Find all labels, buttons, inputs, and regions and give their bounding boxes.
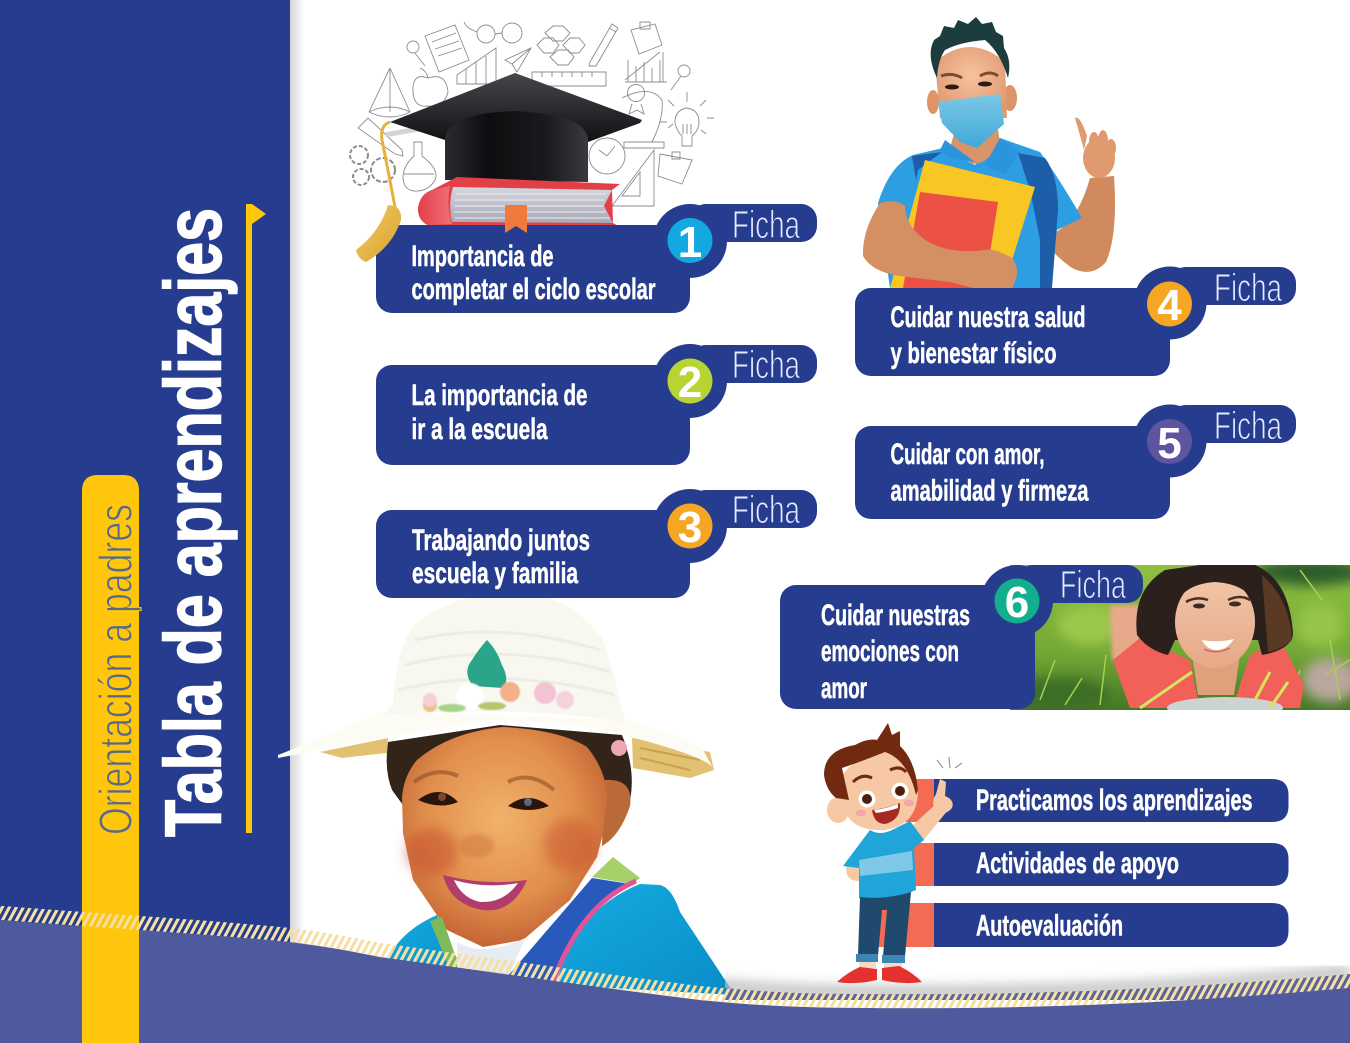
mask [938,94,1004,148]
straw brim underside [320,738,714,778]
head [842,752,918,830]
panel: ficha 6: Cuidar nuestras [821,599,970,632]
hat brim [278,712,713,768]
eyes and brows [1186,597,1250,602]
photo: girl lying in the grass [1010,558,1350,719]
shirt [843,821,924,900]
red shoes [837,966,922,983]
panel: ficha 3: 3 [678,503,702,552]
foreground blades [1140,672,1288,708]
raised arm [912,802,948,842]
icon: bookmark [505,205,527,233]
panel: section list: Actividades de apoyo [976,847,1179,880]
grass background [1010,565,1350,710]
collar [500,878,630,985]
grass blades [1040,570,1350,705]
panel: ficha 5: Cuidar con amor, [890,438,1044,471]
eyes [945,84,959,90]
hatched strip [0,912,1350,1001]
shadow above the wave [700,972,1350,992]
panel: ficha 3 [376,489,817,598]
icon: tassel [356,122,401,262]
illustration: cartoon boy [824,723,962,983]
yellow tab [82,475,139,1043]
pillow [1167,697,1283,710]
number 6 [994,578,1040,624]
ear [827,797,849,823]
bottom wave [0,920,1350,1043]
subtitle: Orientación a padres [90,504,142,835]
panel: ficha 1: completar el ciclo escolar [412,273,656,306]
panel: ficha 5 [855,404,1296,519]
panel: ficha 1 [376,204,817,313]
panel: ficha 6 [780,564,1143,709]
cheeks [856,810,866,816]
fringe [1184,576,1245,594]
hair [387,725,632,830]
panel: blue sidebar [0,0,304,960]
raised hand [1075,118,1116,178]
right arm [1052,176,1115,272]
panel: ficha 4: y bienestar físico [890,337,1056,370]
panel: ficha 1: 1 [678,218,702,267]
shirt [878,138,1082,288]
illustration: school doodles [350,22,714,206]
panel: ficha 3: Trabajando juntos [412,524,590,557]
mouth [443,875,527,910]
hat crown [383,590,625,722]
cap board [390,73,642,142]
panel: ficha 3: escuela y familia [412,557,578,590]
face [935,47,1007,118]
neck [950,130,1000,164]
cuffs [856,954,905,963]
wave band background [725,974,1350,1000]
panel: ficha 6: 6 [1005,578,1029,627]
right sweater [556,884,735,995]
left arm and hand [863,201,1017,288]
left arm [846,860,862,882]
hair [824,723,918,800]
ears [927,90,939,114]
nose [460,834,494,858]
panel: ficha 5: amabilidad y firmeza [890,474,1089,508]
backpack straps [1018,153,1058,288]
hair flower [611,740,627,756]
number 3 [668,504,712,548]
hat leaf [467,640,506,688]
title flag line [246,204,266,833]
white undershirt [457,938,525,985]
panel: ficha 2: Ficha [732,344,800,387]
panel: ficha 5: Ficha [1214,405,1282,448]
panel: ficha 2 [376,344,817,465]
number 2 [668,358,712,404]
ear [602,780,630,846]
book [418,177,620,227]
number 1 [668,218,712,263]
left sweater [385,915,470,980]
hat flowers [423,682,574,712]
arm [1110,605,1145,660]
panel: ficha 1: Ficha [732,204,800,247]
panel: ficha 5: 5 [1157,419,1182,468]
photo: boy with mask and books [863,17,1116,288]
panel: ficha 6: amor [821,672,867,705]
pink strap [552,881,636,985]
jeans [858,892,911,956]
smile [1202,639,1234,650]
cap body [445,110,588,182]
red book [903,192,998,288]
eyes [418,792,458,806]
neck [1192,655,1240,695]
panel: section list: Autoevaluación [976,910,1123,942]
panel: ficha 4: Cuidar nuestra salud [890,301,1086,334]
collar [940,138,1020,175]
panel: ficha 4: 4 [1157,281,1182,330]
face [1175,576,1255,668]
number 4 [1147,282,1192,326]
face [402,727,607,947]
panel: ficha 2: La importancia de [412,379,588,412]
hair [931,17,1009,78]
eyes [858,790,876,808]
panel: ficha 6: emociones con [821,635,959,668]
panel: ficha 4: Ficha [1214,267,1282,310]
panel: ficha 4 [855,266,1296,376]
mouth [872,803,900,824]
panel: ficha 2: 2 [678,358,702,407]
panel: ficha 6: Ficha [1060,564,1126,607]
photo: girl with white hat [278,590,735,995]
title: Tabla de aprendizajes [148,208,238,837]
socks [859,962,902,968]
yellow book [890,160,1035,288]
collar stripes [592,857,640,884]
panel: ficha 2: ir a la escuela [412,413,548,446]
panel: ficha 3: Ficha [732,489,800,532]
illustration: graduation cap and book [390,73,642,227]
sparks [937,757,962,768]
panel: section list [878,779,1288,947]
hair [1136,565,1293,655]
number 5 [1147,419,1192,464]
panel: ficha 1: Importancia de [412,240,554,273]
pointing hand [933,779,953,813]
shirt [1113,638,1304,708]
